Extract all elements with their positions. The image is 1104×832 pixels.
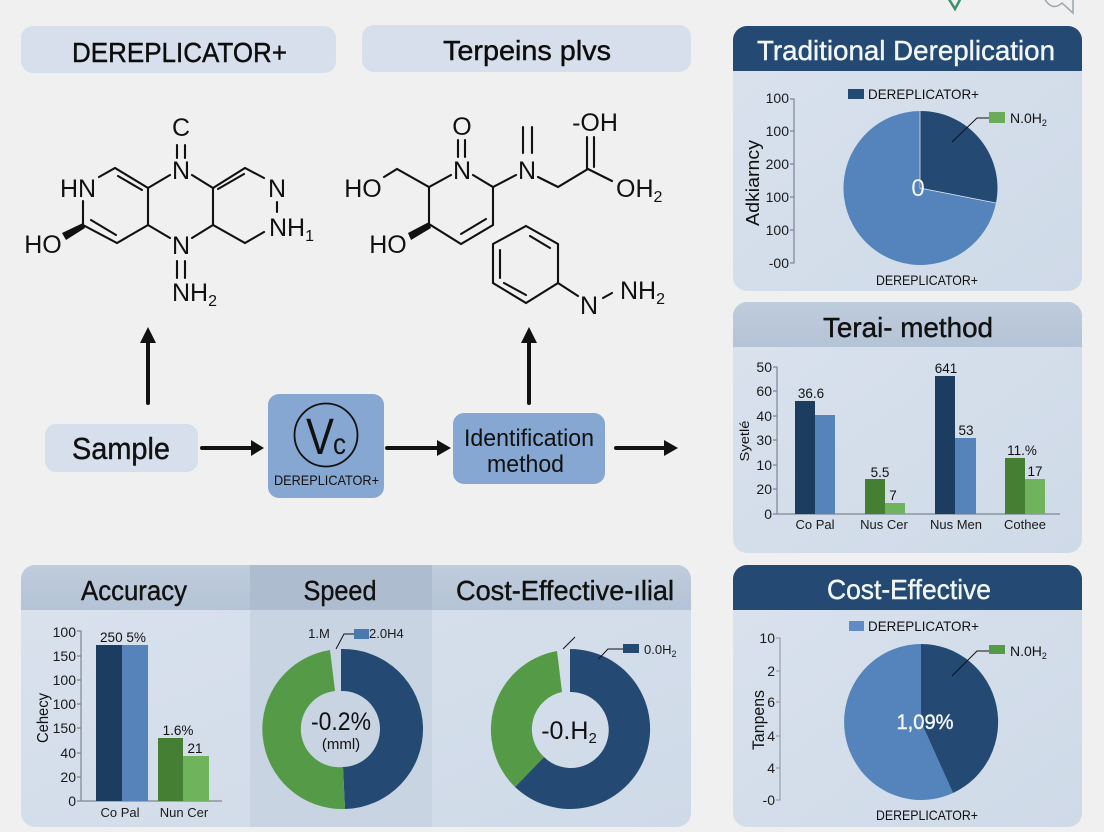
- molecule: right structure: N: [580, 292, 598, 320]
- heading: Speed: Speed: [304, 575, 376, 606]
- panel: Traditional Dereplication: Traditional Dereplication: [757, 35, 1055, 66]
- axis and tick labels: [743, 90, 794, 271]
- icon: cropped grey outline at top edge: [1044, 0, 1073, 13]
- bar chart: accuracy: 150: [53, 720, 76, 736]
- legend: [849, 618, 1047, 823]
- molecule: left structure: 2: [208, 293, 217, 310]
- legend: 2: [1042, 651, 1047, 661]
- donut chart: speed: 1.M: [308, 626, 330, 641]
- panel: comparison metrics: [21, 565, 691, 827]
- heading: Terpeins plvs: Terpeins plvs: [443, 35, 611, 66]
- molecule: right structure: O: [452, 113, 472, 141]
- axis and tick labels: [749, 630, 780, 808]
- molecule: left structure: HN: [60, 175, 96, 203]
- bar chart: 53: [958, 423, 974, 438]
- donut chart: speed: 2.0H4: [369, 626, 404, 641]
- axis and tick labels: -0: [763, 792, 775, 808]
- axis and tick labels: Tanpens: [749, 690, 768, 750]
- legend: DEREPLICATOR+: [876, 807, 978, 823]
- bar chart: accuracy: [35, 624, 222, 820]
- heading: DEREPLICATOR+: [21, 26, 336, 73]
- donut chart: speed: (mml): [322, 736, 360, 753]
- bar chart: accuracy: Cehecy: [35, 693, 52, 743]
- donut chart: cost-effective: 0.0H: [644, 642, 671, 657]
- molecule: right structure: [344, 109, 665, 320]
- legend: N.0H: [1010, 110, 1042, 126]
- axis and tick labels: -00: [769, 255, 789, 271]
- molecule: right structure: N: [518, 157, 536, 185]
- bar chart: 0: [764, 506, 772, 522]
- pie chart: [844, 644, 998, 800]
- axis and tick labels: 100: [766, 222, 789, 238]
- bar chart: accuracy: 100: [53, 624, 76, 640]
- axis and tick labels: 100: [766, 90, 789, 106]
- bar chart: 5.5: [871, 465, 889, 480]
- bar chart: Co Pal: [795, 517, 835, 532]
- pie chart: 0: [911, 175, 925, 202]
- legend: 2: [1042, 118, 1047, 128]
- heading: Terpeins plvs: [362, 25, 691, 72]
- axis and tick labels: 100: [766, 123, 789, 139]
- molecule: left structure: N: [172, 157, 190, 185]
- donut chart: speed: -0.2%: [311, 708, 371, 736]
- pie chart: [843, 111, 997, 265]
- bar chart: 11.%: [1007, 443, 1037, 458]
- axis and tick labels: 6: [767, 694, 775, 710]
- molecule: right structure: -OH: [572, 109, 618, 137]
- molecule: left structure: NH: [172, 279, 208, 307]
- icon: cropped green check at top edge: [947, 0, 962, 9]
- bar chart: accuracy: 150: [53, 648, 76, 664]
- bar chart: 641: [935, 361, 957, 376]
- bar chart: accuracy: 100: [53, 672, 76, 688]
- bar chart: Cothee: [1004, 517, 1046, 532]
- bar chart: 36.6: [798, 386, 824, 401]
- arrow: sample to DEREPLICATOR+: [202, 440, 264, 456]
- bar chart: 40: [756, 408, 772, 424]
- molecule: left structure: [24, 114, 314, 310]
- panel: Traditional Dereplication: [733, 26, 1082, 291]
- molecule: right structure: 2: [656, 291, 665, 308]
- bar chart: accuracy: Co Pal: [100, 805, 140, 820]
- bar chart: accuracy: 40: [60, 745, 76, 761]
- bar chart: 7: [889, 488, 897, 503]
- panel: Terai-method: [733, 302, 1082, 553]
- flow box: DEREPLICATOR+ instrument: c: [333, 428, 346, 461]
- molecule: right structure: HO: [344, 175, 382, 203]
- flow box: Sample: Sample: [72, 431, 170, 466]
- axis and tick labels: 200: [766, 156, 789, 172]
- axis and tick labels: 100: [766, 189, 789, 205]
- axis and tick labels: 10: [759, 630, 775, 646]
- molecule: left structure: C: [172, 114, 190, 142]
- flow box: DEREPLICATOR+ instrument: V: [306, 408, 334, 465]
- donut chart: speed: [262, 626, 423, 809]
- bar chart: 20: [756, 481, 772, 497]
- flow box: Identification method: method: [487, 451, 564, 478]
- molecule: right structure: N: [453, 157, 471, 185]
- arrow: up to right molecule: [521, 327, 537, 403]
- donut chart: cost-effective: [491, 637, 676, 809]
- arrow: identification onward: [616, 440, 678, 456]
- flow box: Identification method: Identification: [464, 425, 594, 452]
- arrow: DEREPLICATOR+ to identification: [387, 440, 451, 456]
- heading: Cost-Effective-lial: Cost-Effective-ılial: [456, 575, 674, 606]
- bar chart: Nus Cer: [860, 517, 909, 532]
- legend: [848, 86, 1047, 288]
- bar chart: accuracy: 20: [60, 769, 76, 785]
- flow box: Sample: [45, 424, 198, 472]
- axis and tick labels: 4: [767, 760, 775, 776]
- molecule: left structure: 1: [305, 228, 314, 245]
- heading: DEREPLICATOR+: DEREPLICATOR+: [72, 37, 287, 68]
- bar chart: accuracy: 250 5%: [100, 630, 146, 645]
- legend: DEREPLICATOR+: [868, 618, 979, 634]
- heading: Accuracy: Accuracy: [81, 575, 187, 606]
- bar chart: accuracy: Nun Cer: [160, 805, 209, 820]
- panel: Cost-Effective: [733, 565, 1082, 827]
- panel: Terai-method: Terai- method: [823, 312, 993, 343]
- bar chart: [737, 359, 1060, 532]
- bar chart: accuracy: 1.6%: [163, 723, 193, 738]
- bar chart: Syetlé: [737, 420, 752, 462]
- bar chart: accuracy: 100: [53, 696, 76, 712]
- donut chart: cost-effective: -0.H: [541, 717, 588, 745]
- panel: Cost-Effective: Cost-Effective: [827, 574, 991, 605]
- arrow: up to left molecule: [140, 327, 156, 403]
- legend: DEREPLICATOR+: [868, 86, 979, 102]
- donut chart: cost-effective: 2: [588, 730, 597, 747]
- molecule: left structure: HO: [24, 231, 62, 259]
- bar chart: 10: [756, 457, 772, 473]
- molecule: right structure: NH: [620, 277, 656, 305]
- donut chart: cost-effective: 2: [671, 649, 676, 659]
- flow box: DEREPLICATOR+ instrument: [268, 394, 384, 498]
- axis and tick labels: Adkiarncy: [743, 140, 763, 226]
- legend: N.0H: [1010, 643, 1042, 659]
- flow box: Identification method: [453, 413, 605, 484]
- flow box: DEREPLICATOR+ instrument: DEREPLICATOR+: [274, 472, 379, 488]
- bar chart: 17: [1027, 464, 1043, 479]
- molecule: right structure: 2: [654, 189, 662, 206]
- bar chart: accuracy: 21: [187, 741, 203, 756]
- legend: DEREPLICATOR+: [876, 272, 978, 288]
- molecule: left structure: NH: [269, 214, 305, 242]
- bar chart: Nus Men: [930, 517, 982, 532]
- bar chart: accuracy: 0: [68, 793, 76, 809]
- axis and tick labels: 4: [767, 728, 775, 744]
- bar chart: 50: [756, 359, 772, 375]
- molecule: left structure: N: [172, 232, 190, 260]
- pie chart: 1,09%: [896, 711, 954, 734]
- bar chart: 60: [756, 383, 772, 399]
- bar chart: 30: [756, 432, 772, 448]
- molecule: right structure: HO: [369, 231, 407, 259]
- axis and tick labels: 2: [767, 663, 775, 679]
- molecule: right structure: OH: [616, 175, 654, 203]
- molecule: left structure: N: [268, 175, 286, 203]
